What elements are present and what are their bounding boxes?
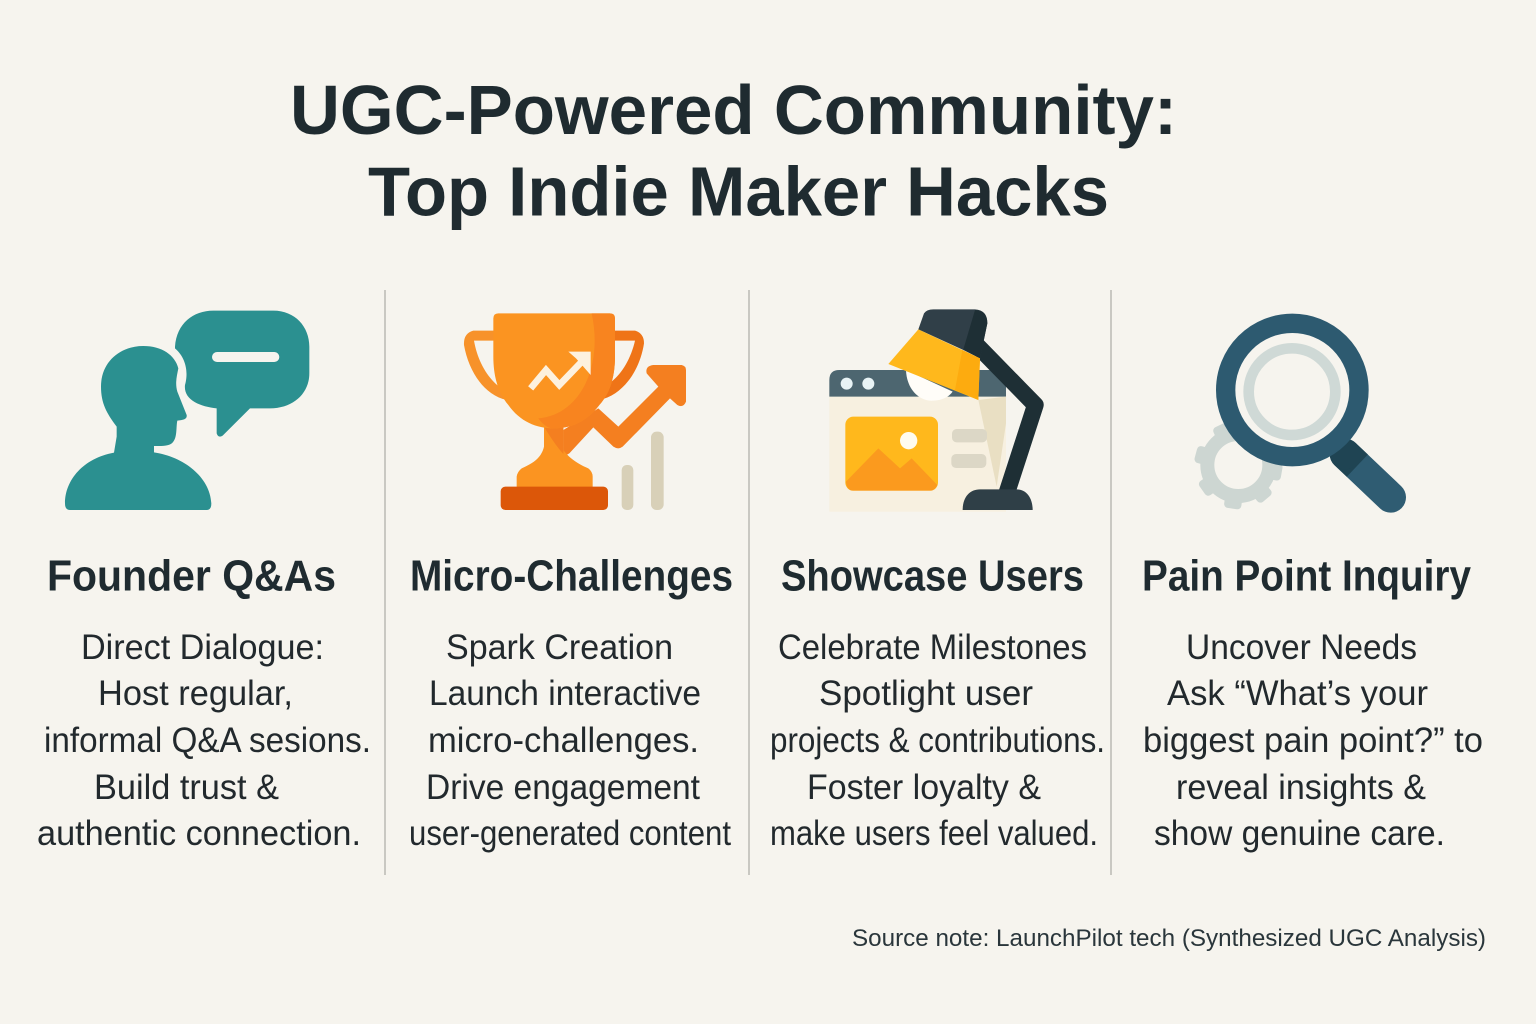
text block: Pain Point Inquiry description: Uncover Needs <box>1186 628 1417 667</box>
text block: Founder Q&As description: informal Q&A sesions. <box>44 721 371 760</box>
text block: Founder Q&As description: Build trust & <box>94 768 279 807</box>
icon: trophy with rising arrow <box>464 313 686 510</box>
text block: Founder Q&As description <box>37 628 371 853</box>
text block: Micro-Challenges description: Launch interactive <box>429 674 701 713</box>
title <box>290 71 1177 230</box>
text block: Micro-Challenges description: Drive engagement <box>426 768 700 807</box>
heading: Pain Point Inquiry: Pain Point Inquiry <box>1142 552 1471 600</box>
text block: Pain Point Inquiry description: Ask “What’s your <box>1167 674 1428 713</box>
text block: Showcase Users description: projects & contributions. <box>770 721 1105 760</box>
text block: Showcase Users description: Celebrate Milestones <box>778 628 1087 667</box>
text block: Micro-Challenges description: Spark Creation <box>446 628 673 667</box>
heading: Founder Q&As: Founder Q&As <box>47 552 336 600</box>
title: Top Indie Maker Hacks <box>368 152 1109 230</box>
text block: Showcase Users description: make users feel valued. <box>770 814 1098 853</box>
text block: Founder Q&As description: Direct Dialogue: <box>81 628 324 667</box>
text block: Micro-Challenges description <box>409 628 731 853</box>
panel: Showcase Users <box>770 309 1105 853</box>
text block: Pain Point Inquiry description <box>1143 628 1483 853</box>
text block: Pain Point Inquiry description: show genuine care. <box>1154 814 1445 853</box>
title: UGC-Powered Community: <box>290 71 1177 149</box>
heading: Showcase Users: Showcase Users <box>781 552 1084 600</box>
text block: Founder Q&As description: Host regular, <box>98 674 293 713</box>
icon: desk lamp over browser window <box>829 309 1035 512</box>
icon: person with speech bubble <box>65 311 309 510</box>
text block: Micro-Challenges description: micro-challenges. <box>428 721 699 760</box>
text block: Pain Point Inquiry description: reveal insights & <box>1176 768 1426 807</box>
text block: Micro-Challenges description: user-generated content <box>409 814 731 853</box>
text block: Showcase Users description: Spotlight user <box>819 674 1033 713</box>
panel: Pain Point Inquiry <box>1142 323 1483 853</box>
text block: Pain Point Inquiry description: biggest pain point?” to <box>1143 721 1483 760</box>
source note: Source note: LaunchPilot tech (Synthesized UGC Analysis) <box>852 925 1486 952</box>
heading: Micro-Challenges: Micro-Challenges <box>410 552 733 600</box>
panel: Founder Q&As <box>37 311 371 853</box>
panel: Micro-Challenges <box>409 313 733 853</box>
icon: magnifying glass with gear <box>1194 323 1391 510</box>
text block: Showcase Users description: Foster loyalty & <box>807 768 1041 807</box>
text block: Founder Q&As description: authentic connection. <box>37 814 361 853</box>
text block: Showcase Users description <box>770 628 1105 853</box>
